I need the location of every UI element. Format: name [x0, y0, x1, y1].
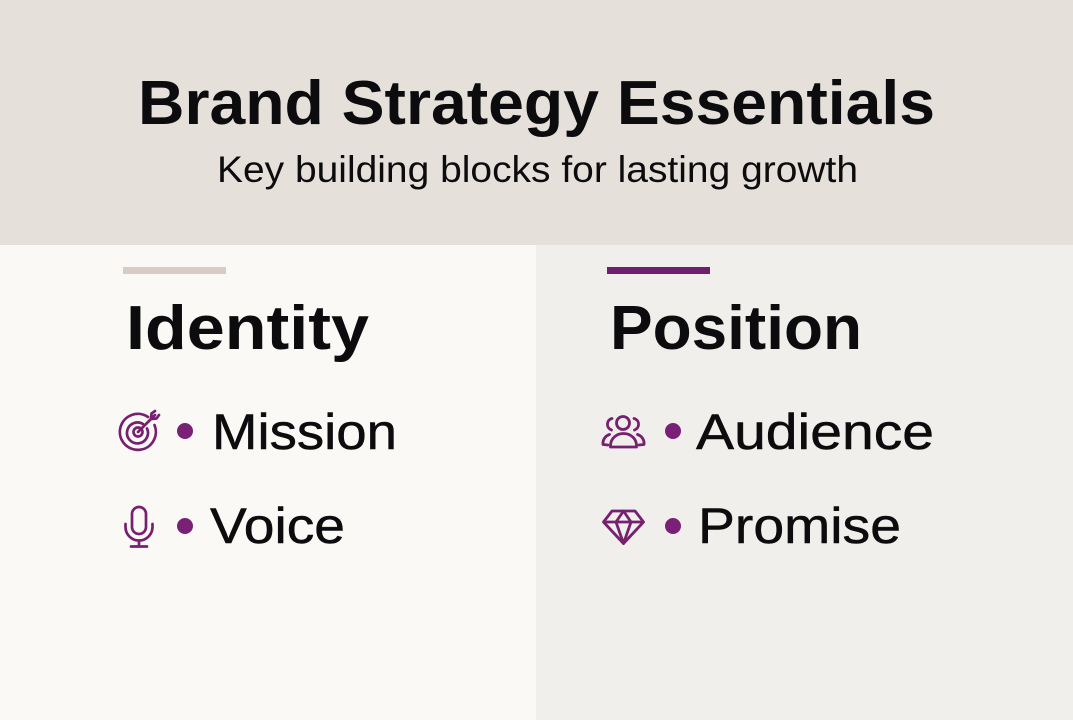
label: audience: Audience	[696, 404, 934, 460]
bullet: voice	[177, 518, 193, 534]
icon: diamond	[604, 511, 644, 544]
panel: position background	[536, 245, 1073, 720]
bullet: promise	[665, 518, 681, 534]
title: Brand Strategy Essentials	[138, 69, 935, 138]
subtitle: Key building blocks for lasting growth	[217, 149, 858, 190]
panel: position	[603, 267, 934, 554]
panel: identity	[120, 267, 397, 554]
icon: microphone	[126, 507, 152, 546]
position accent bar	[607, 267, 710, 274]
header band	[0, 0, 1073, 245]
label: promise: Promise	[698, 498, 901, 554]
bullet: audience	[665, 423, 681, 439]
bullet: mission	[177, 423, 193, 439]
identity heading: Identity	[126, 294, 370, 363]
position heading: Position	[610, 294, 862, 363]
label: voice: Voice	[210, 498, 345, 554]
label: mission: Mission	[212, 404, 397, 460]
identity accent bar	[123, 267, 226, 274]
panel: identity background	[0, 245, 536, 720]
icon: audience group	[603, 416, 644, 447]
icon: target with arrow	[120, 411, 159, 450]
